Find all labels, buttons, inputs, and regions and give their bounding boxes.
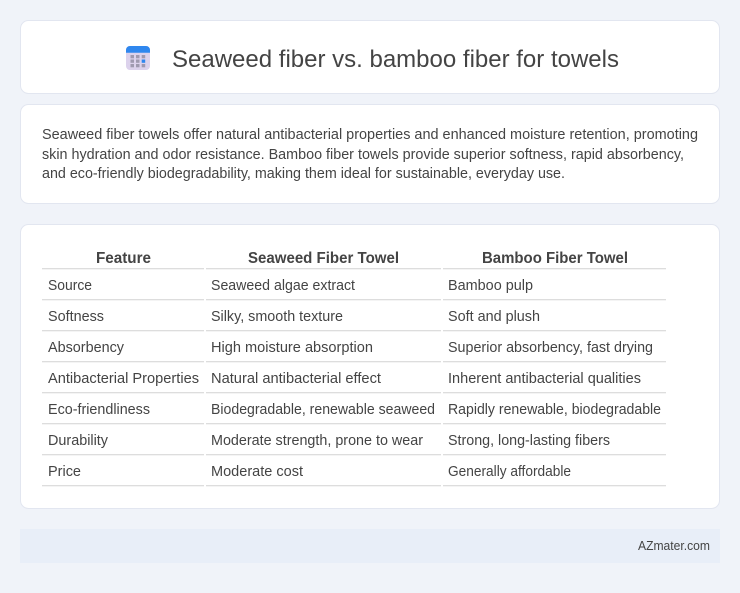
row: softness: Soft and plush [448,308,540,325]
panel: comparison table [20,224,720,508]
row: antibacterial properties: Natural antibacterial effect [211,370,382,387]
icon: calendar [126,46,150,70]
panel: footer [20,529,720,563]
row: eco-friendliness [48,401,661,418]
row: eco-friendliness: Biodegradable, renewable seaweed [211,401,435,418]
row: source [48,277,533,294]
table header row [96,250,628,267]
row: source: Source [48,277,92,294]
row: eco-friendliness: Rapidly renewable, biodegradable [448,401,661,418]
summary text: and eco-friendly biodegradability, making them ideal for sustainable, everyday use. [42,165,565,182]
panel: title header [20,20,720,94]
row: softness: Silky, smooth texture [211,308,343,325]
row: price: Generally affordable [448,463,571,480]
row: durability: Strong, long-lasting fibers [448,432,610,449]
row: absorbency: Superior absorbency, fast drying [448,339,653,356]
title: Seaweed fiber vs. bamboo fiber for towels [172,46,619,73]
row: price [48,463,571,480]
panel: summary [20,104,720,204]
row: softness: Softness [48,308,104,325]
row: absorbency [48,339,653,356]
row: durability: Moderate strength, prone to wear [211,432,423,449]
table header row: Feature [96,250,151,267]
row: source: Bamboo pulp [448,277,533,294]
row: antibacterial properties: Inherent antibacterial qualities [448,370,641,387]
row: absorbency: High moisture absorption [211,339,373,356]
row: durability: Durability [48,432,108,449]
row: price: Price [48,463,81,480]
summary text: Seaweed fiber towels offer natural antibacterial properties and enhanced moisture retention, promoting [42,126,698,143]
row: antibacterial properties [48,370,641,387]
row: durability [48,432,610,449]
summary text: skin hydration and odor resistance. Bamboo fiber towels provide superior softness, rapid absorbency, [42,146,684,163]
row: source: Seaweed algae extract [211,277,356,294]
summary text [42,126,698,182]
row: eco-friendliness: Eco-friendliness [48,401,150,418]
table header row: Bamboo Fiber Towel [482,250,628,267]
row: price: Moderate cost [211,463,304,480]
row: softness [48,308,540,325]
row: antibacterial properties: Antibacterial Properties [48,370,199,387]
row: absorbency: Absorbency [48,339,124,356]
table header row: Seaweed Fiber Towel [248,250,399,267]
footer source text: AZmater.com [638,539,710,553]
